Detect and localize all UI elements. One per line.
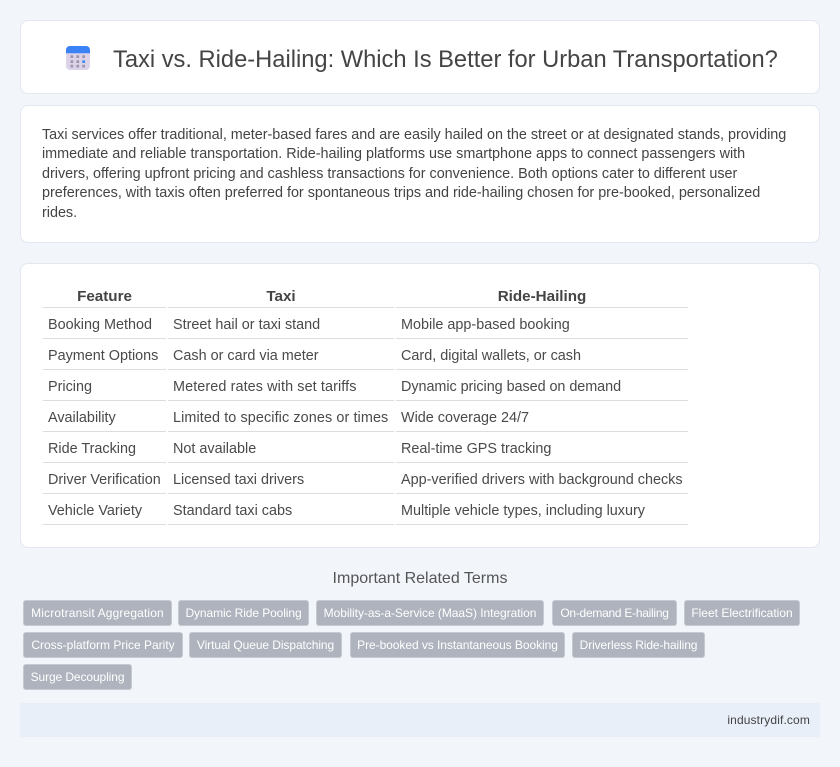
table: comparison: Dynamic pricing based on demand xyxy=(401,379,621,395)
table: comparison: Cash or card via meter xyxy=(173,348,319,364)
heading: related terms: Important Related Terms xyxy=(333,570,507,587)
table: comparison: Real-time GPS tracking xyxy=(401,441,551,457)
text block: description: rides. xyxy=(42,204,77,220)
table: comparison: Ride-Hailing xyxy=(498,288,586,305)
table: comparison: App-verified drivers with background checks xyxy=(401,472,683,488)
tags: related terms: Dynamic Ride Pooling xyxy=(185,606,302,620)
table: comparison: Mobile app-based booking xyxy=(401,317,570,333)
tags: related terms: Driverless Ride-hailing xyxy=(580,638,697,652)
table: comparison: Booking Method xyxy=(48,317,152,333)
footer bar xyxy=(20,703,820,737)
footer: source: industrydif.com xyxy=(727,713,810,727)
table: comparison: Street hail or taxi stand xyxy=(173,317,320,333)
table: comparison: Driver Verification xyxy=(48,472,161,488)
text block: description: immediate and reliable transportation. Ride-hailing platforms use smartphone apps to connect passengers with xyxy=(42,146,745,162)
title: Taxi vs. Ride-Hailing: Which Is Better for Urban Transportation? xyxy=(113,47,778,73)
text block: description: drivers, offering upfront pricing and cashless transactions for convenience. Both options cater to different user xyxy=(42,166,737,182)
table: comparison: Metered rates with set tariffs xyxy=(173,379,356,395)
panel: description xyxy=(20,105,820,243)
table: comparison xyxy=(43,288,688,525)
tags: related terms: Microtransit Aggregation xyxy=(31,606,164,620)
table: comparison: Availability xyxy=(48,410,116,426)
table: comparison: Wide coverage 24/7 xyxy=(401,410,529,426)
text block: description xyxy=(42,126,786,220)
panel: comparison table xyxy=(20,263,820,548)
table: comparison: Not available xyxy=(173,441,256,457)
table: comparison: Ride Tracking xyxy=(48,441,136,457)
icon: calendar xyxy=(66,46,90,70)
text block: description: preferences, with taxis often preferred for spontaneous trips and ride-hailing chosen for pre-booked, personalized xyxy=(42,185,760,201)
table: comparison: Card, digital wallets, or cash xyxy=(401,348,581,364)
table: comparison: Limited to specific zones or times xyxy=(173,410,388,426)
table: comparison: Licensed taxi drivers xyxy=(173,472,304,488)
tags: related terms: Virtual Queue Dispatching xyxy=(197,638,334,652)
tags: related terms: Fleet Electrification xyxy=(691,606,793,620)
tags: related terms: Surge Decoupling xyxy=(31,670,124,684)
table: comparison: Feature xyxy=(77,288,132,305)
panel: header xyxy=(20,20,820,94)
tags: related terms: Pre-booked vs Instantaneous Booking xyxy=(357,638,558,652)
text block: description: Taxi services offer traditional, meter-based fares and are easily hailed on the street or at designated stands, providing xyxy=(42,126,786,142)
table: comparison: Payment Options xyxy=(48,348,158,364)
table: comparison: Multiple vehicle types, including luxury xyxy=(401,503,645,519)
table: comparison: Standard taxi cabs xyxy=(173,503,292,519)
table: comparison: Pricing xyxy=(48,379,92,395)
tags: related terms xyxy=(23,600,800,690)
table: comparison: Vehicle Variety xyxy=(48,503,142,519)
tags: related terms: Cross-platform Price Parity xyxy=(31,638,175,652)
tags: related terms: On-demand E-hailing xyxy=(560,606,669,620)
tags: related terms: Mobility-as-a-Service (MaaS) Integration xyxy=(324,606,536,620)
table: comparison: Taxi xyxy=(266,288,296,305)
